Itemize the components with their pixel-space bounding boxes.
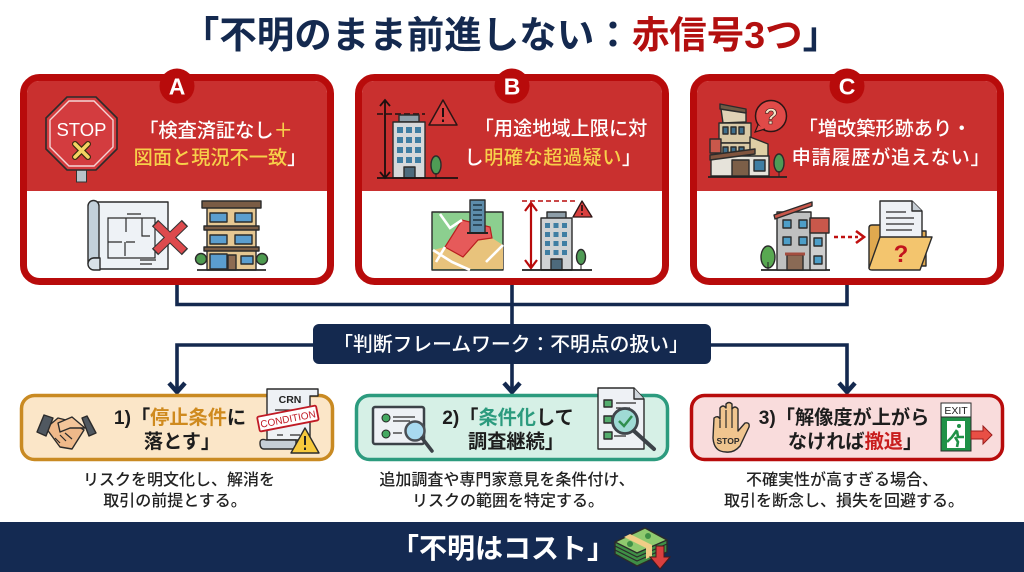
icon: extended building xyxy=(708,104,787,177)
framework label box xyxy=(313,324,711,364)
icon: zoning map xyxy=(432,200,503,270)
description 1: 取引の前提とする。 xyxy=(103,492,247,510)
icon: folder with question mark xyxy=(869,201,932,270)
heading 2: 調査継続」 xyxy=(468,431,564,453)
icon: stop sign: STOP xyxy=(56,119,107,140)
description 2: 追加調査や専門家意見を条件付け、 xyxy=(379,471,635,489)
icon: question bubble: ? xyxy=(764,104,778,129)
heading 1: 1)「停止条件に xyxy=(114,408,246,429)
icon: building over height limit xyxy=(522,201,592,270)
icon: exit sign xyxy=(941,403,992,451)
icon: condition document: CRN xyxy=(279,394,301,406)
icon: stop sign xyxy=(46,97,117,182)
framework label box: 「判断フレームワーク：不明点の扱い」 xyxy=(333,334,689,356)
heading C: 申請履歴が追えない」 xyxy=(792,147,990,169)
description 3: 不確実性が高すぎる場合、 xyxy=(746,470,938,489)
heading B: し明確な超過疑い」 xyxy=(464,148,642,169)
icon: stop hand xyxy=(713,402,749,452)
icon: building with dotted arrow xyxy=(761,202,864,270)
bottom banner: 「不明はコスト」 xyxy=(391,533,615,564)
heading 2: 2)「条件化して xyxy=(442,408,574,429)
icon: stop hand: STOP xyxy=(716,436,740,446)
panel: card B xyxy=(358,68,666,282)
icon: height limit building xyxy=(377,100,458,178)
heading A: 図面と現況不一致」 xyxy=(134,148,306,169)
badge A: A xyxy=(169,74,185,100)
framework branch lines xyxy=(169,345,855,392)
heading 1: 落とす」 xyxy=(144,431,220,453)
icon: exit sign: EXIT xyxy=(944,405,968,417)
badge A xyxy=(160,68,194,104)
icon: condition document xyxy=(257,389,319,453)
icon: folder with question mark: ? xyxy=(894,241,908,268)
icon: condition document: CONDITION xyxy=(260,409,317,431)
panel: card C xyxy=(694,68,1000,282)
badge C: C xyxy=(839,74,855,100)
icon: money stack with down arrow xyxy=(615,528,670,569)
heading C: 「増改築形跡あり・ xyxy=(799,118,971,140)
icon: question bubble xyxy=(755,100,786,132)
heading 3: 3)「解像度が上がら xyxy=(759,406,929,429)
description 1: リスクを明文化し、解消を xyxy=(83,471,275,489)
bottom banner xyxy=(0,522,1024,572)
icon: blueprint with red cross xyxy=(88,201,185,270)
title: 「不明のまま前進しない：赤信号3つ」 xyxy=(182,14,840,56)
panel: option 3 xyxy=(692,396,1002,460)
icon: handshake xyxy=(37,415,96,449)
description 2: リスクの範囲を特定する。 xyxy=(412,492,604,510)
badge B: B xyxy=(504,74,520,100)
icon: apartment building xyxy=(196,201,268,270)
heading A: 「検査済証なし＋ xyxy=(139,121,293,142)
heading 3: なければ撤退」 xyxy=(788,432,922,453)
panel: option 1 xyxy=(22,389,332,460)
panel: option 2 xyxy=(356,388,668,460)
panel: card A xyxy=(24,68,330,282)
badge C xyxy=(830,68,864,104)
heading B: 「用途地域上限に対 xyxy=(475,118,647,140)
icon: document review xyxy=(598,388,654,449)
badge B xyxy=(494,68,530,104)
connector lines from cards to framework box xyxy=(177,284,847,326)
description 3: 取引を断念し、損失を回避する。 xyxy=(724,492,964,510)
icon: checklist magnifier xyxy=(373,407,432,451)
